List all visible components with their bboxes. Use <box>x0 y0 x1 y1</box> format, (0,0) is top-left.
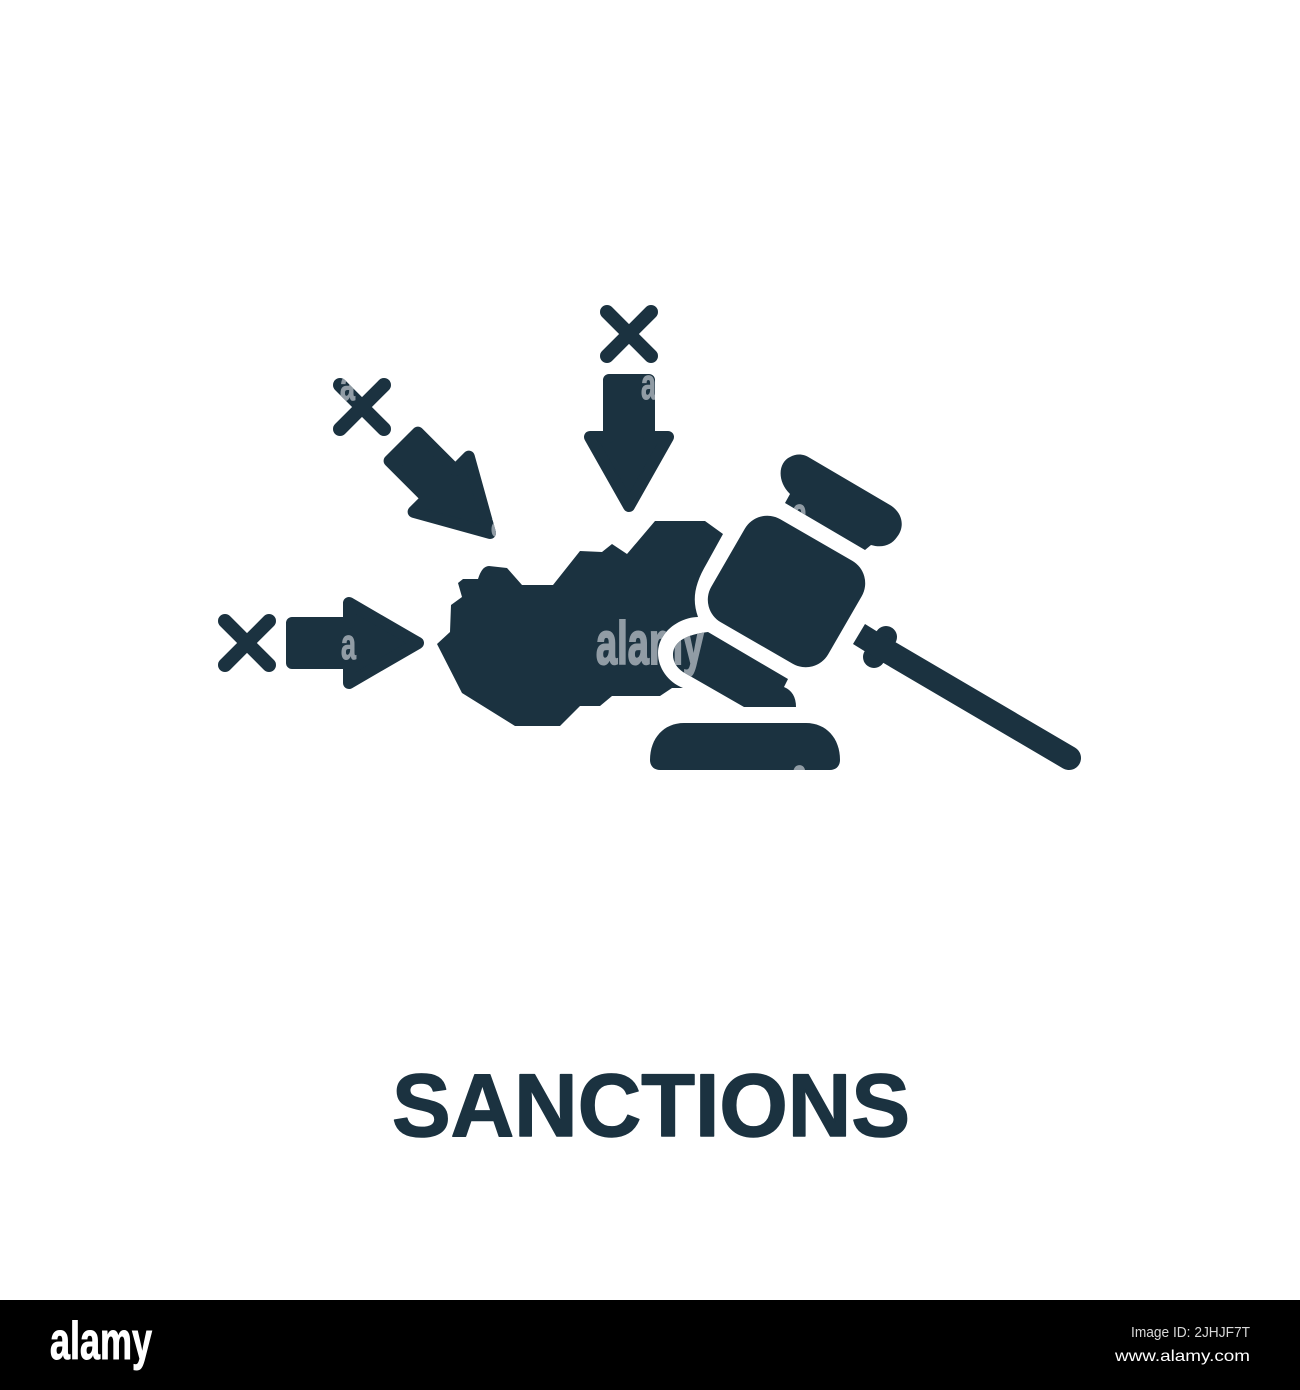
watermark over icon: a <box>641 360 656 409</box>
gavel lower cap over map <box>673 632 796 707</box>
arrow: pointing right <box>292 603 418 683</box>
gavel base <box>650 723 840 770</box>
watermark over icon: alamy <box>596 610 704 677</box>
watermark over icon: a <box>340 361 355 410</box>
watermark over icon: a <box>792 489 807 538</box>
website: www.alamy.com <box>1114 1348 1250 1365</box>
image id: Image ID: 2JHJF7T <box>1131 1324 1250 1341</box>
arrow: pointing down <box>590 380 668 506</box>
watermark over icon: a <box>792 750 807 799</box>
sanctions icon <box>225 312 1069 770</box>
footer bar <box>0 1300 1300 1390</box>
icon: cross diagonal <box>340 385 384 429</box>
arrow: pointing diagonally <box>376 419 518 561</box>
title: SANCTIONS <box>392 1055 910 1155</box>
gavel handle <box>853 624 1069 758</box>
watermark over icon: a <box>491 497 506 546</box>
footer logo: alamy <box>50 1312 152 1371</box>
country map <box>437 521 723 726</box>
icon: cross left <box>225 621 269 665</box>
gavel head <box>698 506 875 677</box>
watermark over icon: a <box>341 620 356 669</box>
icon: cross top <box>607 312 651 356</box>
gavel top cap <box>781 454 902 550</box>
watermark over icon <box>340 375 806 770</box>
